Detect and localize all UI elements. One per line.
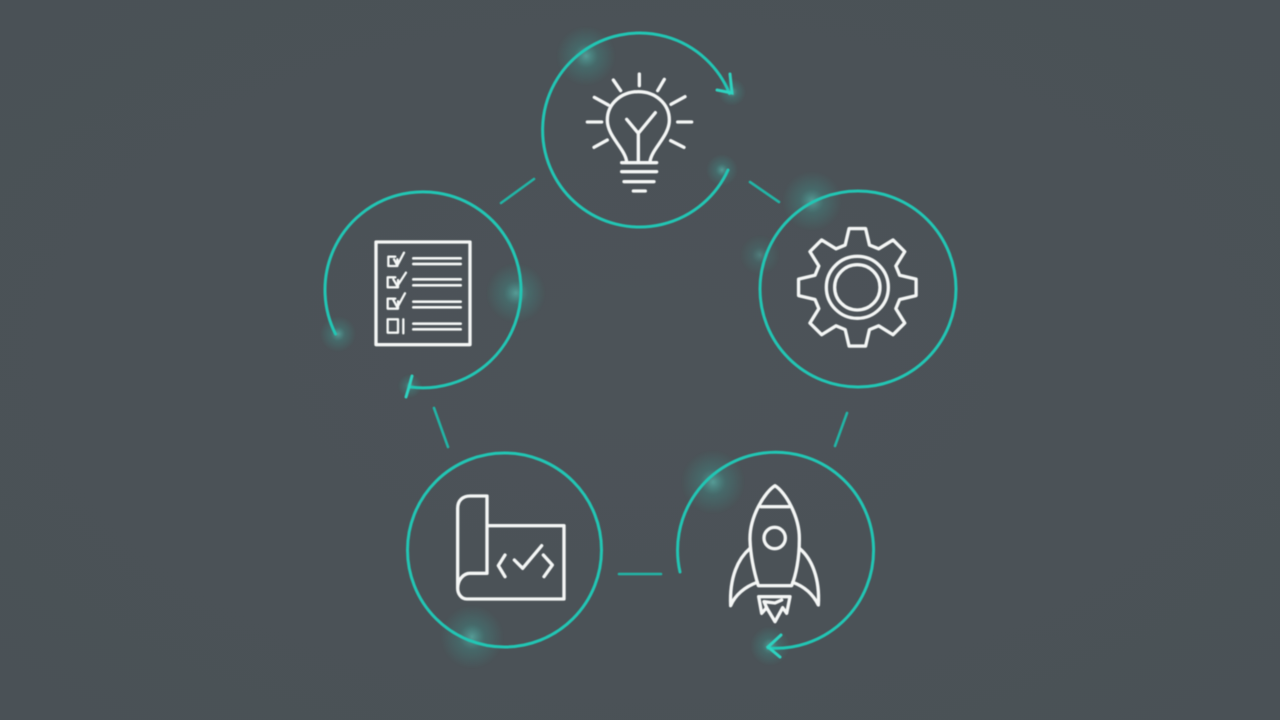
connector: checklist to idea (501, 179, 534, 203)
ring: settings (760, 191, 956, 387)
connector: settings to launch (835, 413, 847, 446)
icon: blueprint scroll with code check (458, 496, 564, 599)
ring: blueprint (408, 453, 602, 647)
node: launch (678, 450, 874, 666)
arrowhead: idea (717, 74, 732, 93)
icon: rocket (731, 486, 819, 622)
node: settings (740, 171, 956, 387)
ring arrow: checklist (325, 192, 521, 388)
ring arrow: idea (543, 33, 730, 227)
icon: light bulb (587, 74, 692, 191)
node: checklist (320, 192, 546, 398)
arrowhead: checklist (406, 376, 412, 397)
arrowhead: launch (768, 635, 781, 657)
icon: gear (799, 229, 916, 346)
connector: idea to settings (750, 182, 779, 202)
connector: launch to blueprint (619, 573, 661, 575)
icon: checklist (376, 242, 470, 345)
node: blueprint (408, 453, 602, 669)
connector: blueprint to checklist (434, 408, 448, 447)
ring arrow: launch (678, 452, 874, 648)
node: idea (543, 26, 746, 227)
